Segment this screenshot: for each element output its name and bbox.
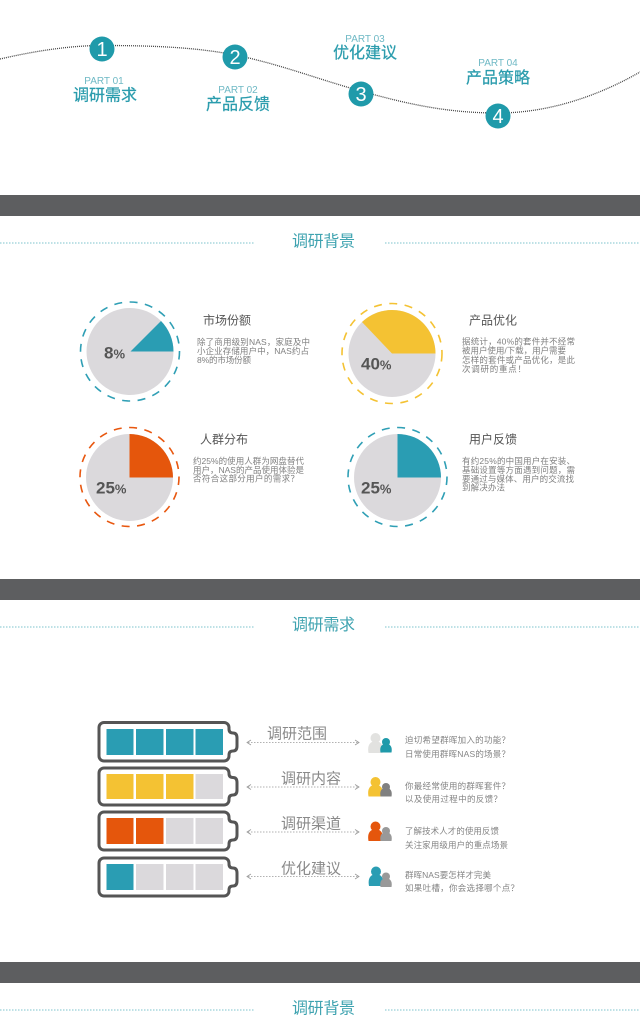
title: 市场份额 [203,312,251,328]
battery row 3 [99,812,508,850]
step 2 label: 产品反馈 [206,96,270,114]
double arrow [247,830,359,834]
step 4 marker: 4 [492,106,504,128]
body text: 被用户使用/下载，用户需要 [462,346,566,356]
question text: 迫切希望群晖加入的功能？ [405,735,510,745]
body text: 8%的市场份额 [197,355,251,365]
body text [462,336,575,374]
question text: 关注家用级用户的重点场景 [405,840,508,850]
step 2 marker: 2 [229,47,241,69]
double arrow [247,874,359,879]
body text [197,337,310,365]
battery row 2 [99,768,510,805]
step 3 marker: 3 [355,84,367,106]
panel: user feedback [348,428,575,526]
question text: 了解技术人才的使用反馈 [405,826,499,836]
step 2 label: PART 02 [218,85,258,96]
pie 40%: 40% [361,354,392,374]
body text: 次调研的重点！ [462,364,526,374]
body text: 约25%的使用人群为网盘替代 [193,456,304,466]
step 4 label: PART 04 [478,58,518,69]
step 3 marker [348,82,374,106]
pie 8%: 8% [104,344,125,362]
pie 25% teal [348,428,447,526]
divider band 2 [0,579,640,600]
body text [462,456,575,492]
heading: background: 调研背景 [292,232,355,250]
pie 40% [342,304,442,404]
step 4 label [466,58,530,87]
body text: 据统计，40%的套件并不经常 [462,336,575,346]
body text: 有约25%的中国用户在安装、 [462,456,575,466]
heading: background repeat: 调研背景 [292,1000,355,1018]
step 1 label [73,76,137,104]
icon: people [368,733,392,753]
label: 调研内容 [281,770,341,788]
pie 25% orange [80,428,179,526]
question text: 你最经常使用的群晖套件？ [405,781,510,791]
question text: 群晖NAS要怎样才完美 [405,870,491,880]
title: 人群分布 [200,432,248,446]
step 1 marker: 1 [96,39,108,61]
question text: 以及使用过程中的反馈？ [405,794,502,804]
step 2 label [206,85,270,114]
step 1 marker [90,36,114,62]
double arrow [247,740,359,745]
step 1 label: 调研需求 [73,86,137,104]
label: 优化建议 [281,860,341,878]
icon: people [368,822,392,841]
question text [405,735,510,759]
divider band 3 [0,962,640,983]
timeline: four parts along a curve [0,34,640,128]
label: 调研范围 [267,726,327,742]
body text: 小企业存储用户中，NAS约占 [197,346,309,356]
step 4 label: 产品策略 [466,69,530,87]
panel: audience [80,428,304,526]
question text: 如果吐槽，你会选择哪个点？ [405,883,519,893]
step 4 marker [486,104,510,128]
step 3 label [333,34,397,62]
battery icon [99,722,237,761]
question text [405,781,510,804]
title: 用户反馈 [469,432,517,446]
label: 调研渠道 [281,816,341,832]
panel: product optimisation [342,304,575,404]
double arrow [247,784,359,790]
heading: research needs: 调研需求 [292,616,355,634]
step 3 label: PART 03 [345,34,385,45]
body text: 否符合这部分用户的需求？ [193,474,299,484]
question text: 日常使用群晖NAS的场景？ [405,749,510,759]
battery icon [99,812,237,850]
body text [193,456,304,484]
step 2 marker [222,44,248,70]
body text: 基础设置等方面遇到问题，需 [462,465,575,475]
battery row 4 [99,858,519,896]
pie 25% teal: 25% [361,478,392,498]
step 1 label: PART 01 [84,76,124,87]
battery row 1 [99,722,510,761]
body text: 怎样的套件或产品优化，是此 [462,355,575,365]
step 3 label: 优化建议 [333,44,397,62]
question text [405,826,508,850]
body text: 要通过与媒体、用户的交流找 [462,474,574,484]
dotted curve [0,46,640,113]
question text [405,870,519,893]
pie 25% orange: 25% [96,478,127,498]
icon: people [368,777,392,796]
divider band 1 [0,195,640,216]
panel: market share [80,302,310,401]
battery icon [99,858,237,896]
body text: 到解决办法 [462,482,505,492]
icon: people [369,866,392,887]
battery icon [99,768,237,805]
pie 8% [80,302,180,401]
title: 产品优化 [469,314,517,328]
body text: 用户，NAS的产品使用体验是 [193,465,304,475]
body text: 除了商用级别NAS，家庭及中 [197,337,310,347]
